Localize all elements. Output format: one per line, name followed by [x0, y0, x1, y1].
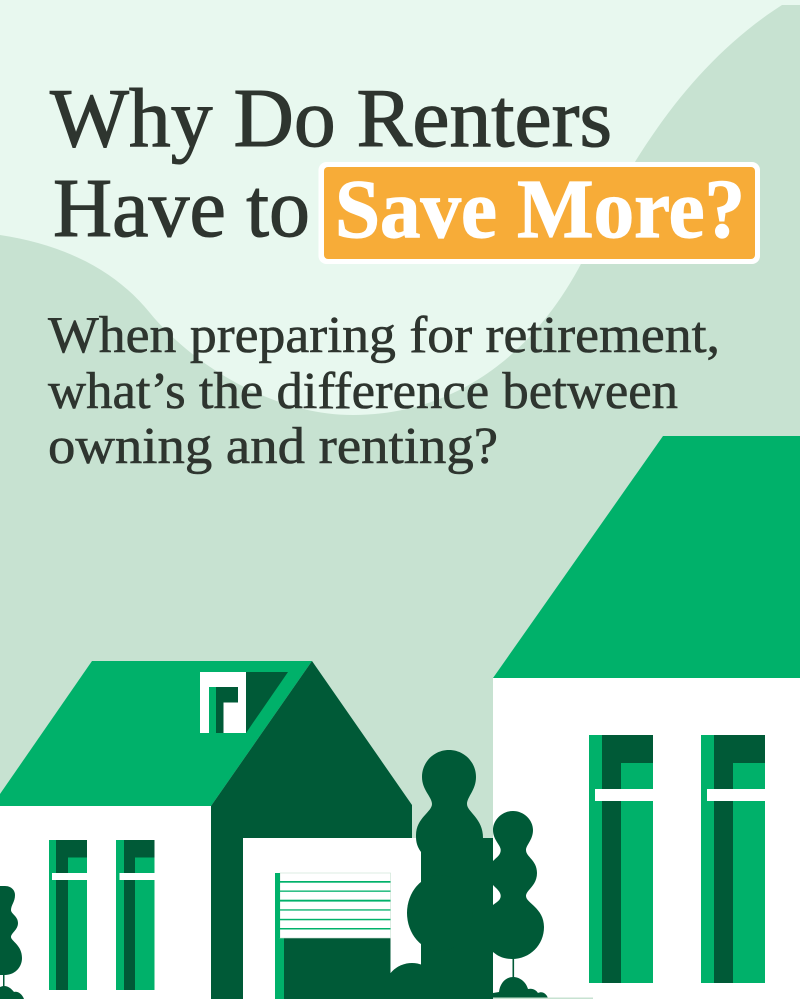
- right house roof: [493, 436, 800, 678]
- subtitle: When preparing for retirement,: [48, 307, 720, 364]
- left house roof: [0, 661, 312, 806]
- left house window 2: [116, 840, 154, 990]
- garage door: [275, 873, 390, 999]
- left house wall: [0, 806, 211, 999]
- title: Why Do Renters: [50, 72, 612, 165]
- highlighted label: Save More?: Save More?: [335, 163, 745, 256]
- garage wall: [243, 838, 423, 999]
- right house window 2: [701, 735, 765, 983]
- left edge tree: [0, 886, 24, 999]
- small tree: [485, 811, 548, 998]
- dormer window: [200, 672, 288, 733]
- subtitle: [48, 307, 720, 475]
- subtitle: what’s the difference between: [48, 363, 678, 420]
- right house window 1: [589, 735, 653, 983]
- left house: [0, 661, 423, 999]
- right house wall: [493, 678, 800, 999]
- title: Have to: [53, 162, 310, 255]
- ground strip: [493, 998, 593, 999]
- large tree: [384, 750, 493, 999]
- title: [50, 72, 612, 255]
- subtitle: owning and renting?: [48, 418, 498, 475]
- left house gable: [211, 661, 412, 999]
- right house: [493, 436, 800, 999]
- left house window 1: [49, 840, 87, 990]
